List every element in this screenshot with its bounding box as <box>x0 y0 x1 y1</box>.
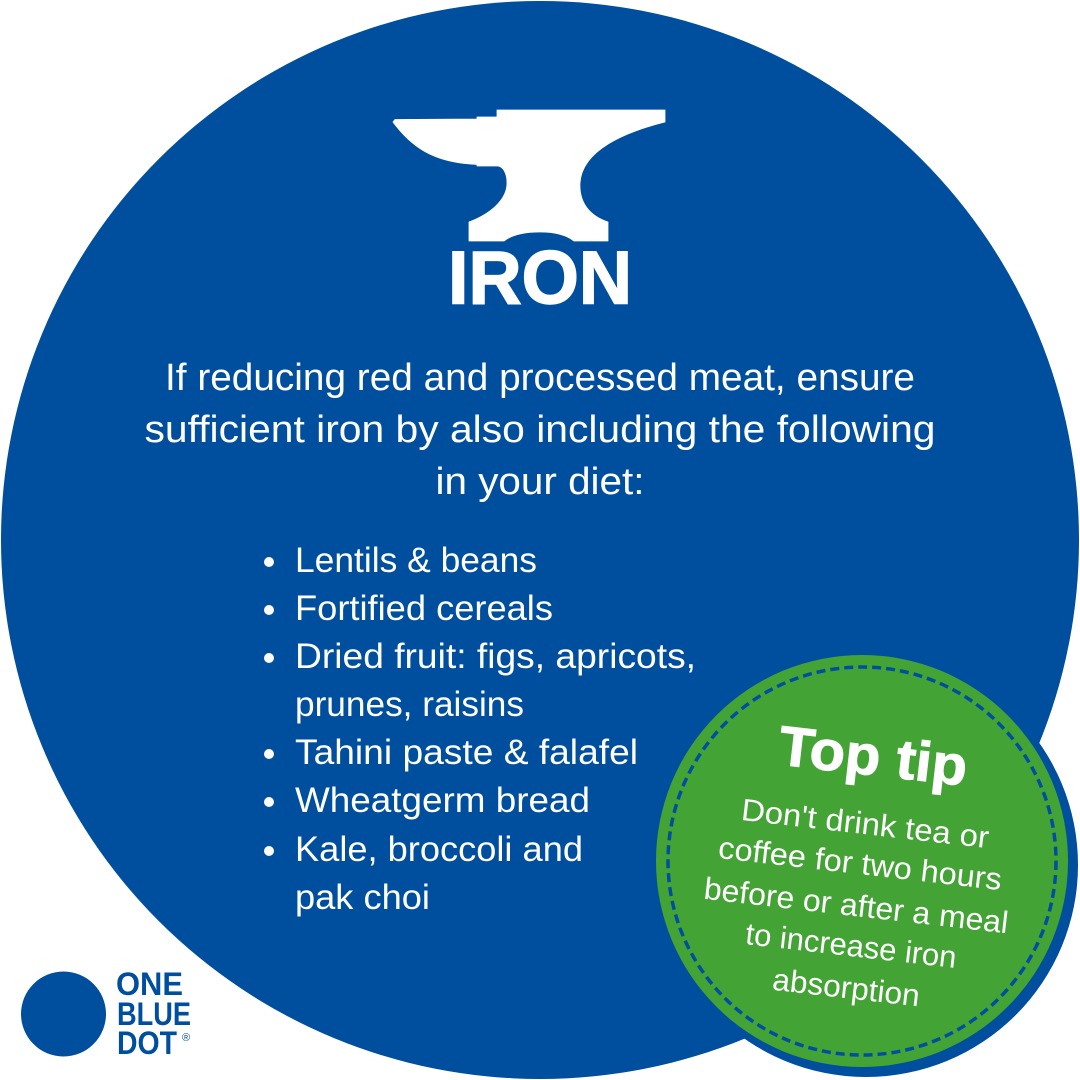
callout: top tip badge <box>654 653 1078 1077</box>
list of iron-rich foods: Wheatgerm bread <box>295 781 590 820</box>
callout body <box>702 792 1010 1013</box>
list of iron-rich foods: Tahini paste & falafel <box>295 733 638 772</box>
callout body: absorption <box>771 962 922 1013</box>
intro text: sufficient iron by also including the following <box>144 409 935 451</box>
callout body: Don't drink tea or <box>740 792 991 855</box>
list of iron-rich foods: pak choi <box>295 878 430 917</box>
title: IRON <box>448 236 632 320</box>
list of iron-rich foods: Dried fruit: figs, apricots, <box>295 637 696 676</box>
callout body: coffee for two hours <box>717 830 1004 897</box>
callout heading: Top tip <box>776 714 971 798</box>
logo: One Blue Dot: DOT <box>117 1025 177 1061</box>
logo: One Blue Dot: BLUE <box>117 996 191 1032</box>
callout body: to increase iron <box>744 916 958 975</box>
intro text: in your diet: <box>436 461 644 503</box>
intro text: If reducing red and processed meat, ensure <box>165 357 915 399</box>
logo: One Blue Dot <box>21 966 191 1061</box>
logo: One Blue Dot: ONE <box>116 966 183 1002</box>
list of iron-rich foods <box>264 541 696 917</box>
logo: One Blue Dot: ® <box>182 1032 190 1044</box>
list of iron-rich foods: prunes, raisins <box>295 685 524 724</box>
list of iron-rich foods: Kale, broccoli and <box>295 830 583 869</box>
intro text <box>144 357 935 503</box>
list of iron-rich foods: Lentils & beans <box>295 541 537 580</box>
callout body: before or after a meal <box>702 871 1010 940</box>
list of iron-rich foods: Fortified cereals <box>295 589 553 628</box>
icon: anvil <box>393 110 665 241</box>
